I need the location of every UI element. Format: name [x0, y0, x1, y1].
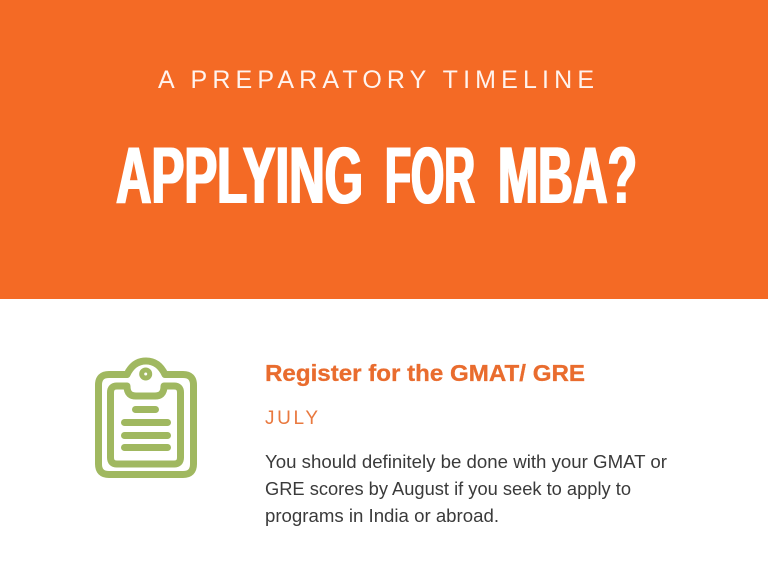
heading: step title: Register for the GMAT/ GRE — [265, 360, 585, 386]
date label: JULY — [265, 408, 318, 429]
title: APPLYING — [116, 131, 363, 221]
title: FOR — [385, 131, 475, 221]
panel: orange header — [0, 0, 768, 299]
subtitle: A PREPARATORY TIMELINE — [158, 66, 594, 94]
text block: description: GRE scores by August if you seek to apply to — [265, 479, 631, 499]
title: MBA? — [498, 131, 637, 221]
text block: description: programs in India or abroad. — [265, 506, 499, 526]
icon: clipboard — [98, 361, 194, 474]
text block: description — [265, 452, 667, 526]
text block: description: You should definitely be done with your GMAT or — [265, 452, 667, 472]
